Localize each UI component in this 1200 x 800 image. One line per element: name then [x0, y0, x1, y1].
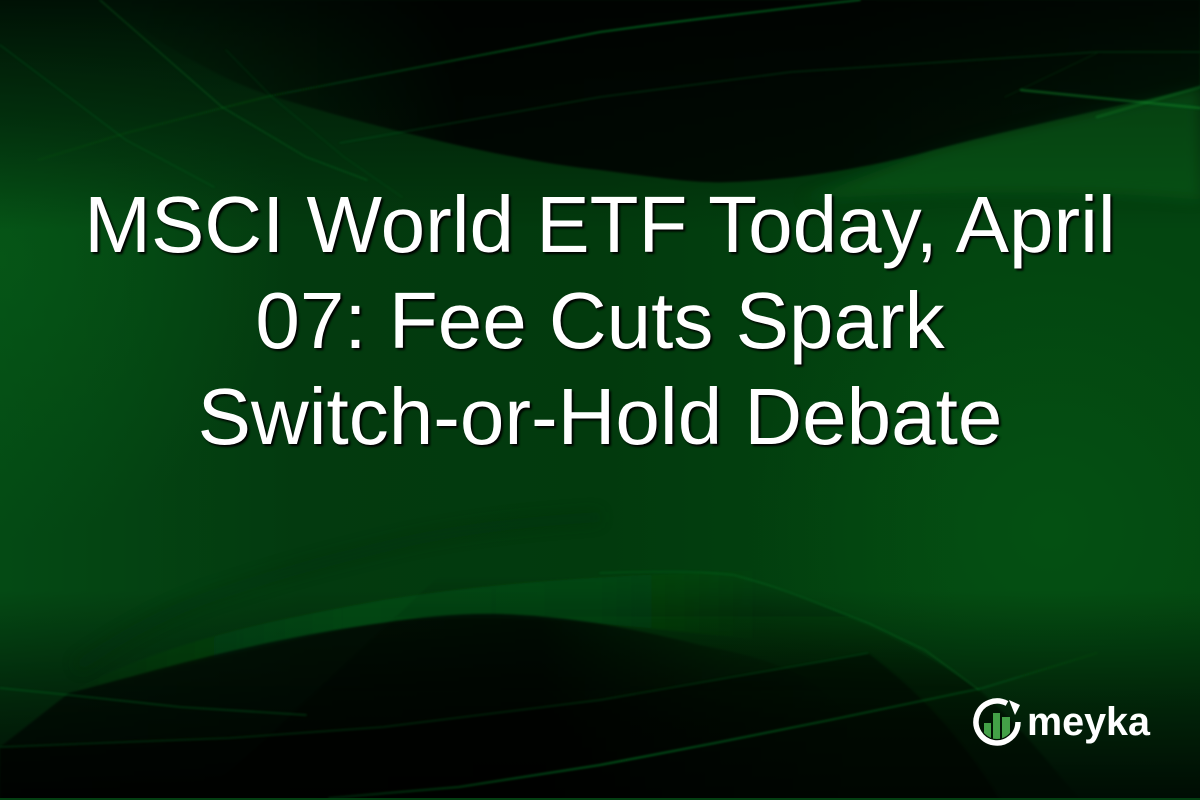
- logo: meyka: [973, 698, 1151, 746]
- icon: ring with green bars: [976, 700, 1020, 743]
- title: [84, 180, 1116, 461]
- title: Switch-or-Hold Debate: [198, 372, 1002, 461]
- title: MSCI World ETF Today, April: [84, 180, 1116, 269]
- title: 07: Fee Cuts Spark: [255, 276, 945, 365]
- wordmark: meyka: [1027, 700, 1151, 744]
